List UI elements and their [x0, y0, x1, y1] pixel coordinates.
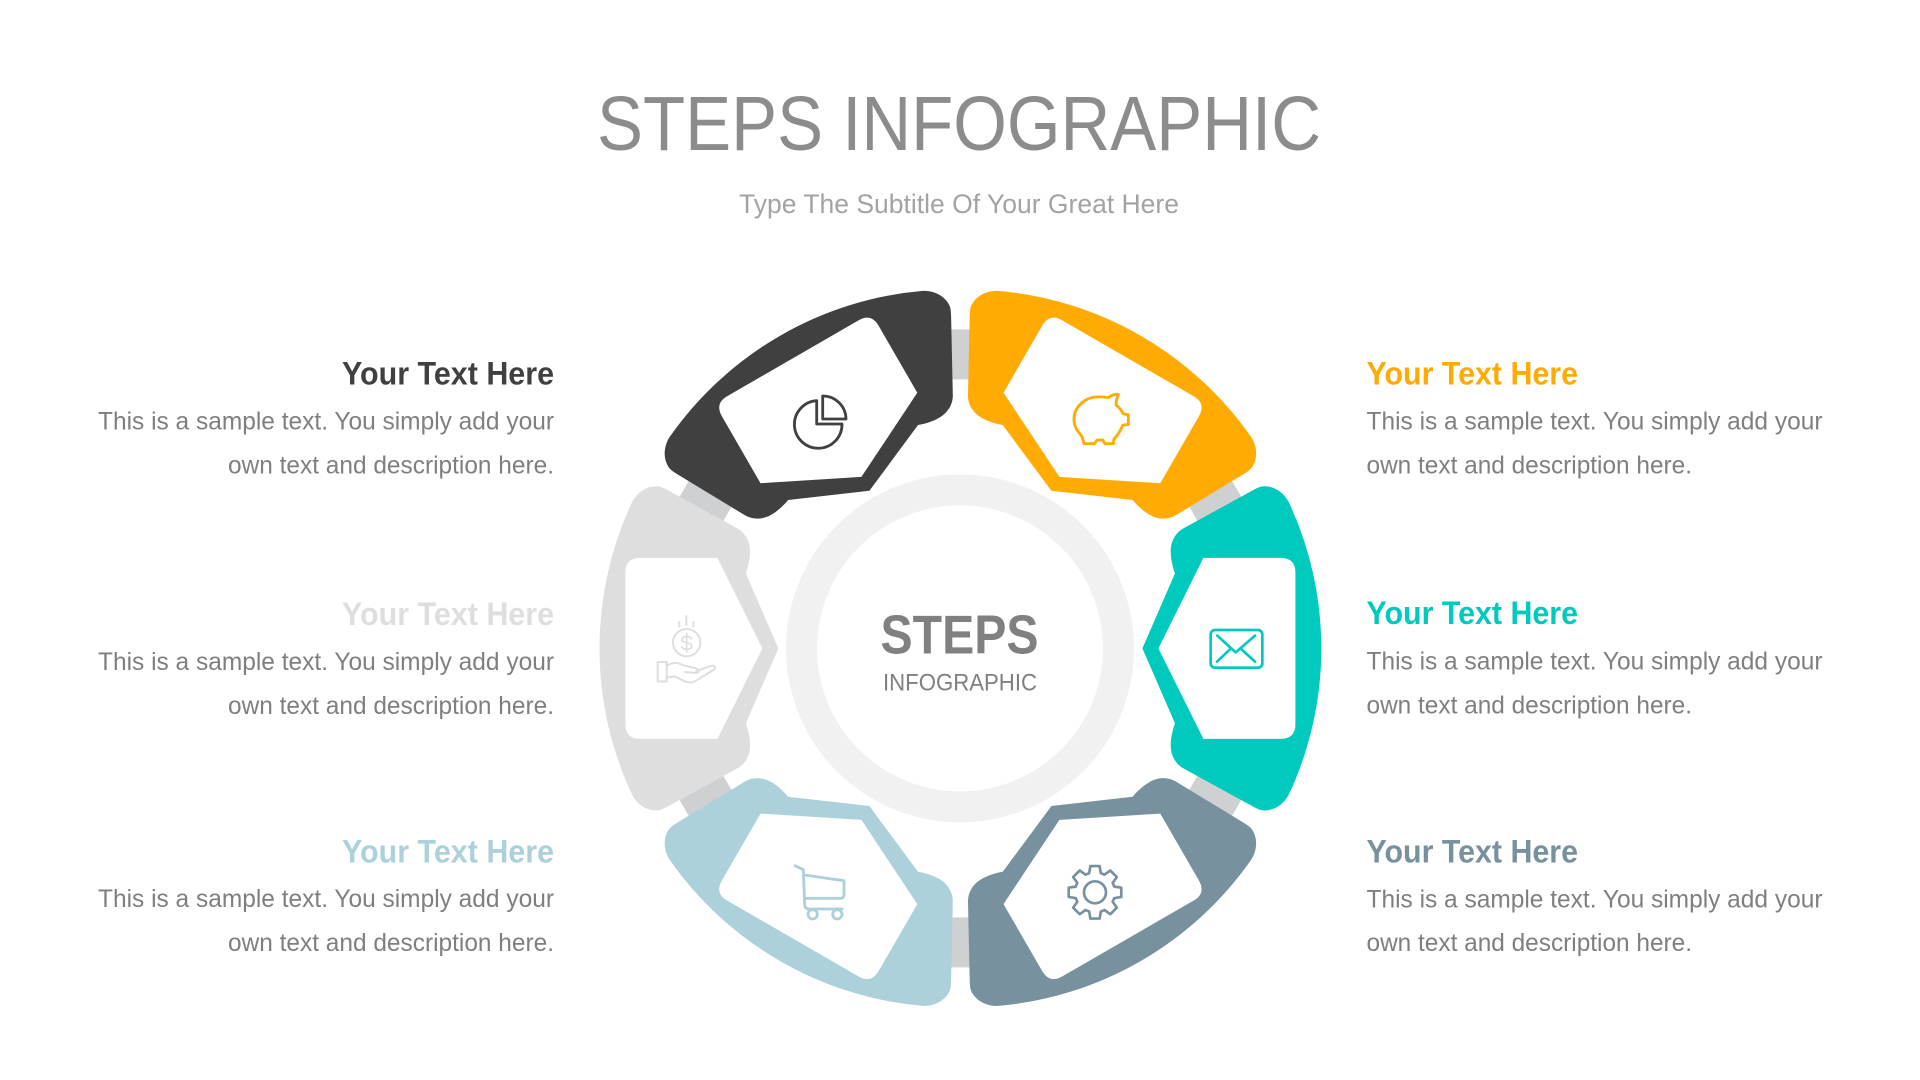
body line 2: own text and description here. — [1366, 451, 1692, 479]
text block: right middle — [1366, 595, 1822, 719]
segment: teal — [1142, 486, 1321, 810]
segment: orange — [911, 255, 1281, 572]
heading: Your Text Here — [342, 833, 554, 869]
icon: piggy bank — [1074, 394, 1128, 444]
body line 2: own text and description here. — [228, 929, 554, 957]
center label: steps: STEPS — [880, 603, 1038, 665]
body line 2: own text and description here. — [228, 692, 554, 720]
subtitle: Type The Subtitle Of Your Great Here — [739, 189, 1179, 219]
icon: coin and hand — [658, 616, 715, 682]
segment: light gray — [599, 486, 778, 810]
icon: pie chart — [794, 396, 846, 448]
segment: light blue — [640, 725, 1010, 1042]
text block: left bottom — [98, 833, 554, 957]
body line 1: This is a sample text. You simply add your — [1366, 407, 1822, 435]
heading: Your Text Here — [1366, 833, 1578, 869]
body line 1: This is a sample text. You simply add your — [98, 407, 554, 435]
segment: dark — [640, 255, 1010, 572]
body line 2: own text and description here. — [228, 451, 554, 479]
icon: gear — [1069, 866, 1121, 919]
heading: Your Text Here — [1366, 355, 1578, 391]
icon: envelope — [1211, 630, 1262, 668]
text block: right bottom — [1366, 833, 1822, 957]
text block: left top — [98, 355, 554, 479]
connectors between segments — [677, 329, 1244, 967]
body line 1: This is a sample text. You simply add your — [98, 885, 554, 913]
text block: right top — [1366, 355, 1822, 479]
body line 2: own text and description here. — [1366, 691, 1692, 719]
heading: Your Text Here — [342, 355, 554, 391]
center ring — [802, 490, 1118, 807]
center label: infographic: INFOGRAPHIC — [883, 670, 1037, 697]
body line 1: This is a sample text. You simply add your — [1366, 885, 1822, 913]
text block: left middle — [98, 596, 554, 720]
icon: shopping cart — [795, 866, 844, 919]
heading: Your Text Here — [342, 596, 554, 632]
body line 1: This is a sample text. You simply add your — [98, 648, 554, 676]
body line 2: own text and description here. — [1366, 929, 1692, 957]
body line 1: This is a sample text. You simply add your — [1366, 647, 1822, 675]
heading: Your Text Here — [1366, 595, 1578, 631]
title: STEPS INFOGRAPHIC — [597, 81, 1321, 167]
segment: slate — [911, 725, 1281, 1042]
